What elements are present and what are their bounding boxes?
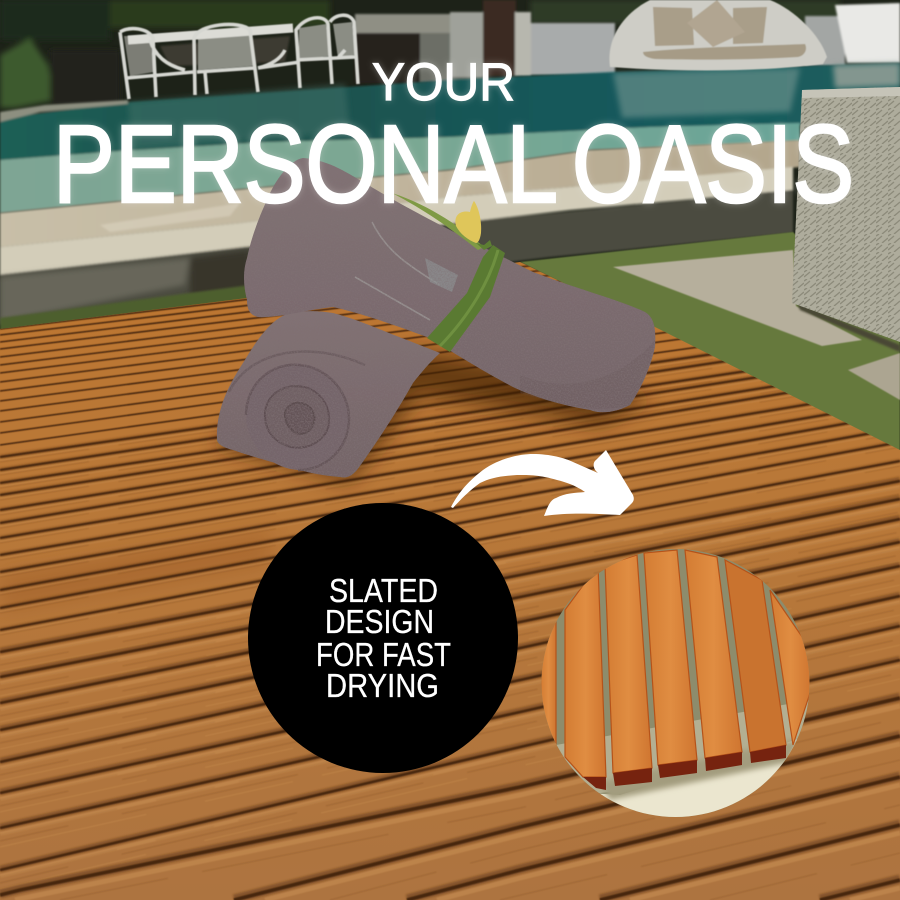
- title line: your: YOUR: [372, 53, 515, 112]
- lower towel roll: [217, 311, 440, 477]
- lawn: [520, 232, 900, 452]
- background: resort pool scene: [0, 0, 900, 455]
- stained wall patches: [0, 250, 250, 322]
- plank highlights: [0, 330, 900, 900]
- grass strip under wall: [0, 285, 250, 332]
- slat end faces: [583, 745, 786, 790]
- wooden deck with slats: [0, 221, 900, 900]
- plank shadows: [0, 327, 900, 899]
- slat strips: [541, 550, 811, 777]
- wicker cube: [792, 87, 900, 352]
- title: [53, 53, 854, 226]
- white pool chairs: [120, 15, 358, 99]
- pool stone edge: [0, 140, 800, 325]
- callout text: DESIGN: [325, 603, 434, 640]
- pool water: [0, 63, 900, 213]
- far wall and tree trunk: [355, 0, 900, 83]
- callout text: [316, 572, 451, 704]
- callout text: SLATED: [329, 572, 438, 609]
- wood grain streaks: [0, 332, 900, 900]
- paving stones: [613, 250, 900, 400]
- plank gaps: [0, 221, 900, 900]
- callout: slated design: [248, 503, 518, 773]
- pool sofa: [609, 0, 827, 70]
- title line: personal oasis: PERSONAL: [53, 103, 558, 226]
- rolled towels with green band and flower: [217, 158, 655, 477]
- arrow: callout to detail: [451, 450, 634, 516]
- green band: [427, 245, 505, 352]
- towel shadow on deck: [215, 350, 650, 482]
- chair table: [160, 36, 290, 66]
- detail photo: wooden slats close-up: [541, 549, 811, 818]
- pool reflections: [128, 63, 900, 150]
- leaf and flower: [392, 193, 492, 250]
- garden foliage: [0, 0, 840, 108]
- callout text: FOR FAST: [316, 636, 451, 673]
- title line: personal oasis: OASIS: [572, 103, 854, 226]
- deck edge strip: [657, 333, 900, 455]
- reddish darker plank: [5, 536, 266, 603]
- callout text: DRYING: [326, 667, 439, 704]
- upper towel roll: [244, 158, 655, 412]
